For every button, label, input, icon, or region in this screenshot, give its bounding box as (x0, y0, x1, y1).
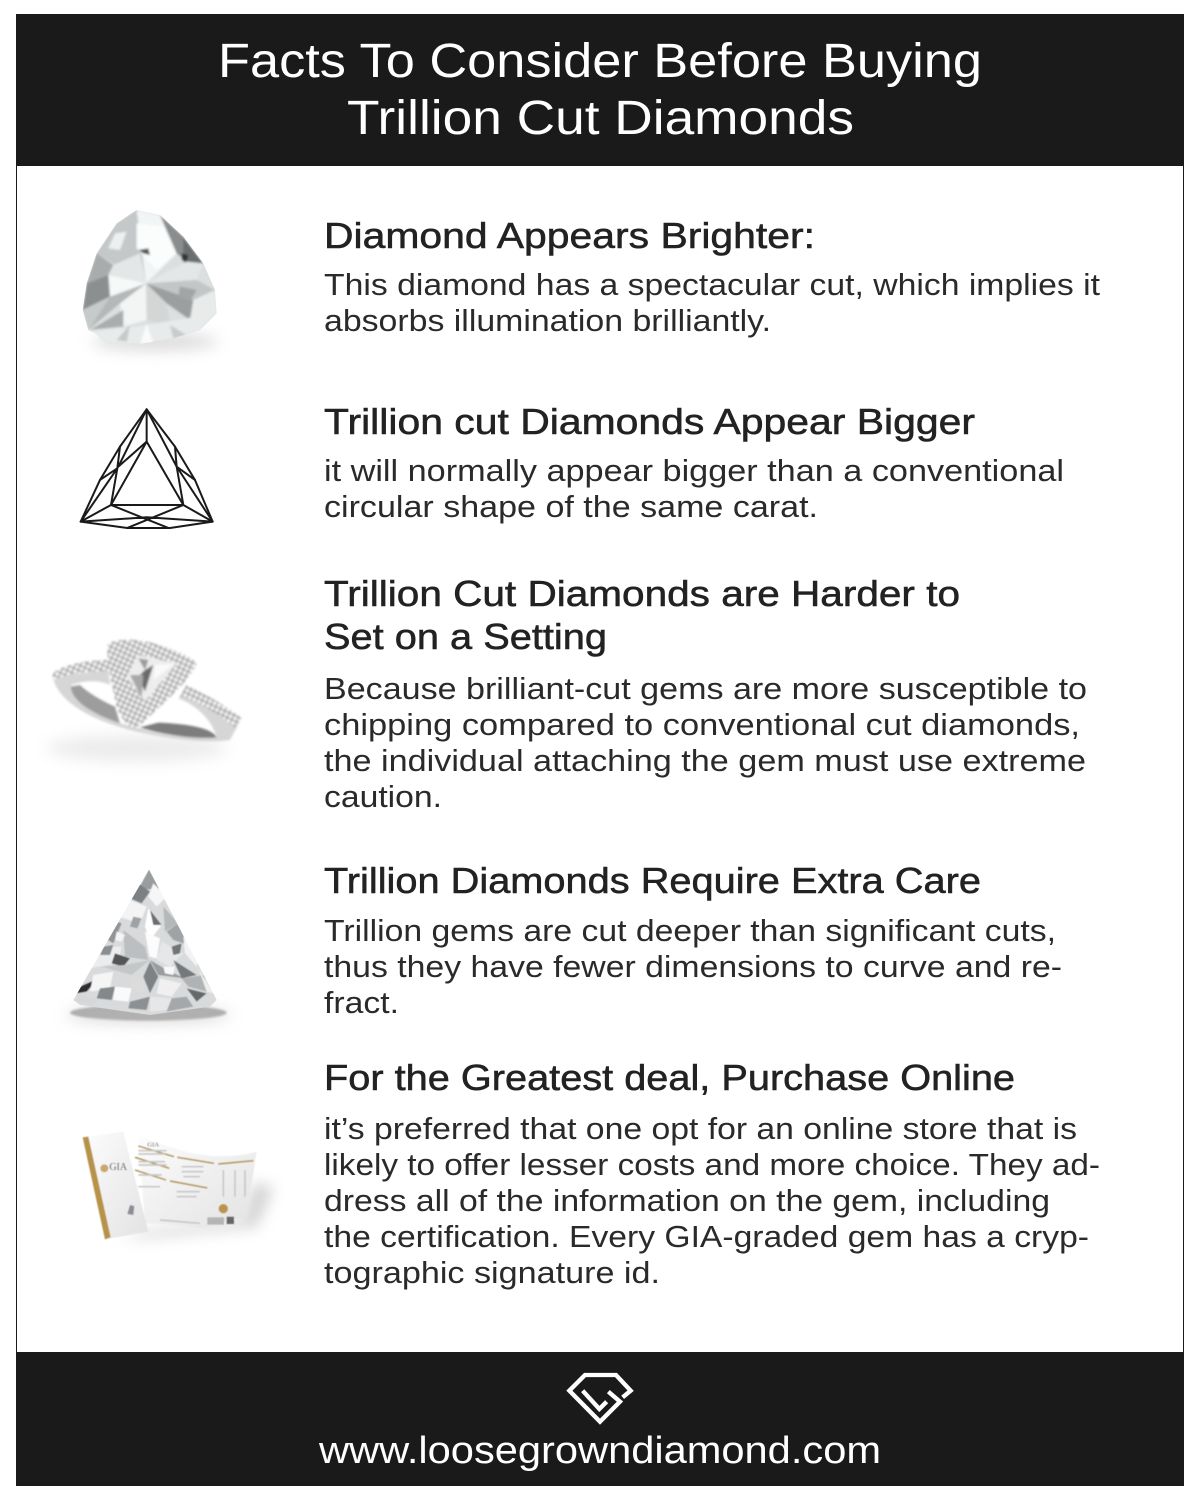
title: Trillion Cut Diamonds (347, 92, 854, 145)
center stone (127, 655, 177, 702)
section 2: appear bigger (324, 401, 1064, 524)
section 5: purchase online: tographic signature id. (324, 1255, 660, 1290)
icon: rounded trillion diamond photo (82, 210, 216, 356)
section 2: appear bigger: it will normally appear bigger than a conventional (324, 453, 1064, 488)
section 3: harder to set (324, 573, 1087, 814)
folder cover (83, 1132, 148, 1239)
section 3: harder to set: caution. (324, 779, 442, 814)
icon: sharp trillion diamond photo (65, 867, 232, 1024)
certificate sheet (83, 1132, 257, 1239)
section 3: harder to set: Set on a Setting (324, 616, 607, 657)
icon: diamond halo ring photo (47, 640, 242, 762)
section 4: require extra care: thus they have fewer dimensions to curve and re- (324, 949, 1062, 984)
section 4: require extra care: Trillion gems are cut deeper than significant cuts, (324, 913, 1056, 948)
pave right (180, 685, 242, 727)
section 3: harder to set: the individual attaching the gem must use extreme (324, 743, 1086, 778)
section 4: require extra care (324, 860, 1062, 1020)
halo (107, 640, 197, 728)
header band (16, 14, 1184, 166)
section 2: appear bigger: circular shape of the same carat. (324, 489, 818, 524)
title (218, 35, 982, 145)
icon: GIA certificate (83, 1132, 273, 1240)
section 2: appear bigger: Trillion cut Diamonds Appear Bigger (324, 401, 975, 442)
section 4: require extra care: fract. (324, 985, 399, 1020)
section 3: harder to set: chipping compared to conventional cut diamonds, (324, 707, 1080, 742)
section 5: purchase online: For the Greatest deal, Purchase Online (324, 1057, 1015, 1098)
section 1: diamond appears brighter: Diamond Appears Brighter: (324, 215, 815, 256)
section 3: harder to set: Because brilliant-cut gems are more susceptible to (324, 671, 1087, 706)
icon: trillion cut line diagram (81, 409, 213, 528)
section 1: diamond appears brighter: This diamond has a spectacular cut, which implies it (324, 267, 1100, 302)
website url: www.loosegrowndiamond.com (318, 1430, 881, 1472)
outer shank (53, 670, 241, 741)
icon: brand diamond logo (569, 1375, 631, 1422)
section 5: purchase online: it’s preferred that one opt for an online store that is (324, 1111, 1077, 1146)
section 5: purchase online: likely to offer lesser costs and more choice. They ad- (324, 1147, 1100, 1182)
certificate sheet: GIA (109, 1162, 128, 1173)
section 5: purchase online: the certification. Every GIA-graded gem has a cryp- (324, 1219, 1089, 1254)
pave left (53, 660, 110, 680)
section 4: require extra care: Trillion Diamonds Require Extra Care (324, 860, 981, 901)
certificate sheet: GIA (147, 1142, 159, 1149)
title: Facts To Consider Before Buying (218, 35, 982, 88)
section 1: diamond appears brighter: absorbs illumination brilliantly. (324, 303, 771, 338)
section 5: purchase online (324, 1057, 1100, 1290)
footer band (16, 1352, 1184, 1486)
section 1: diamond appears brighter (324, 215, 1100, 338)
section 3: harder to set: Trillion Cut Diamonds are Harder to (324, 573, 960, 614)
section 5: purchase online: dress all of the information on the gem, including (324, 1183, 1050, 1218)
